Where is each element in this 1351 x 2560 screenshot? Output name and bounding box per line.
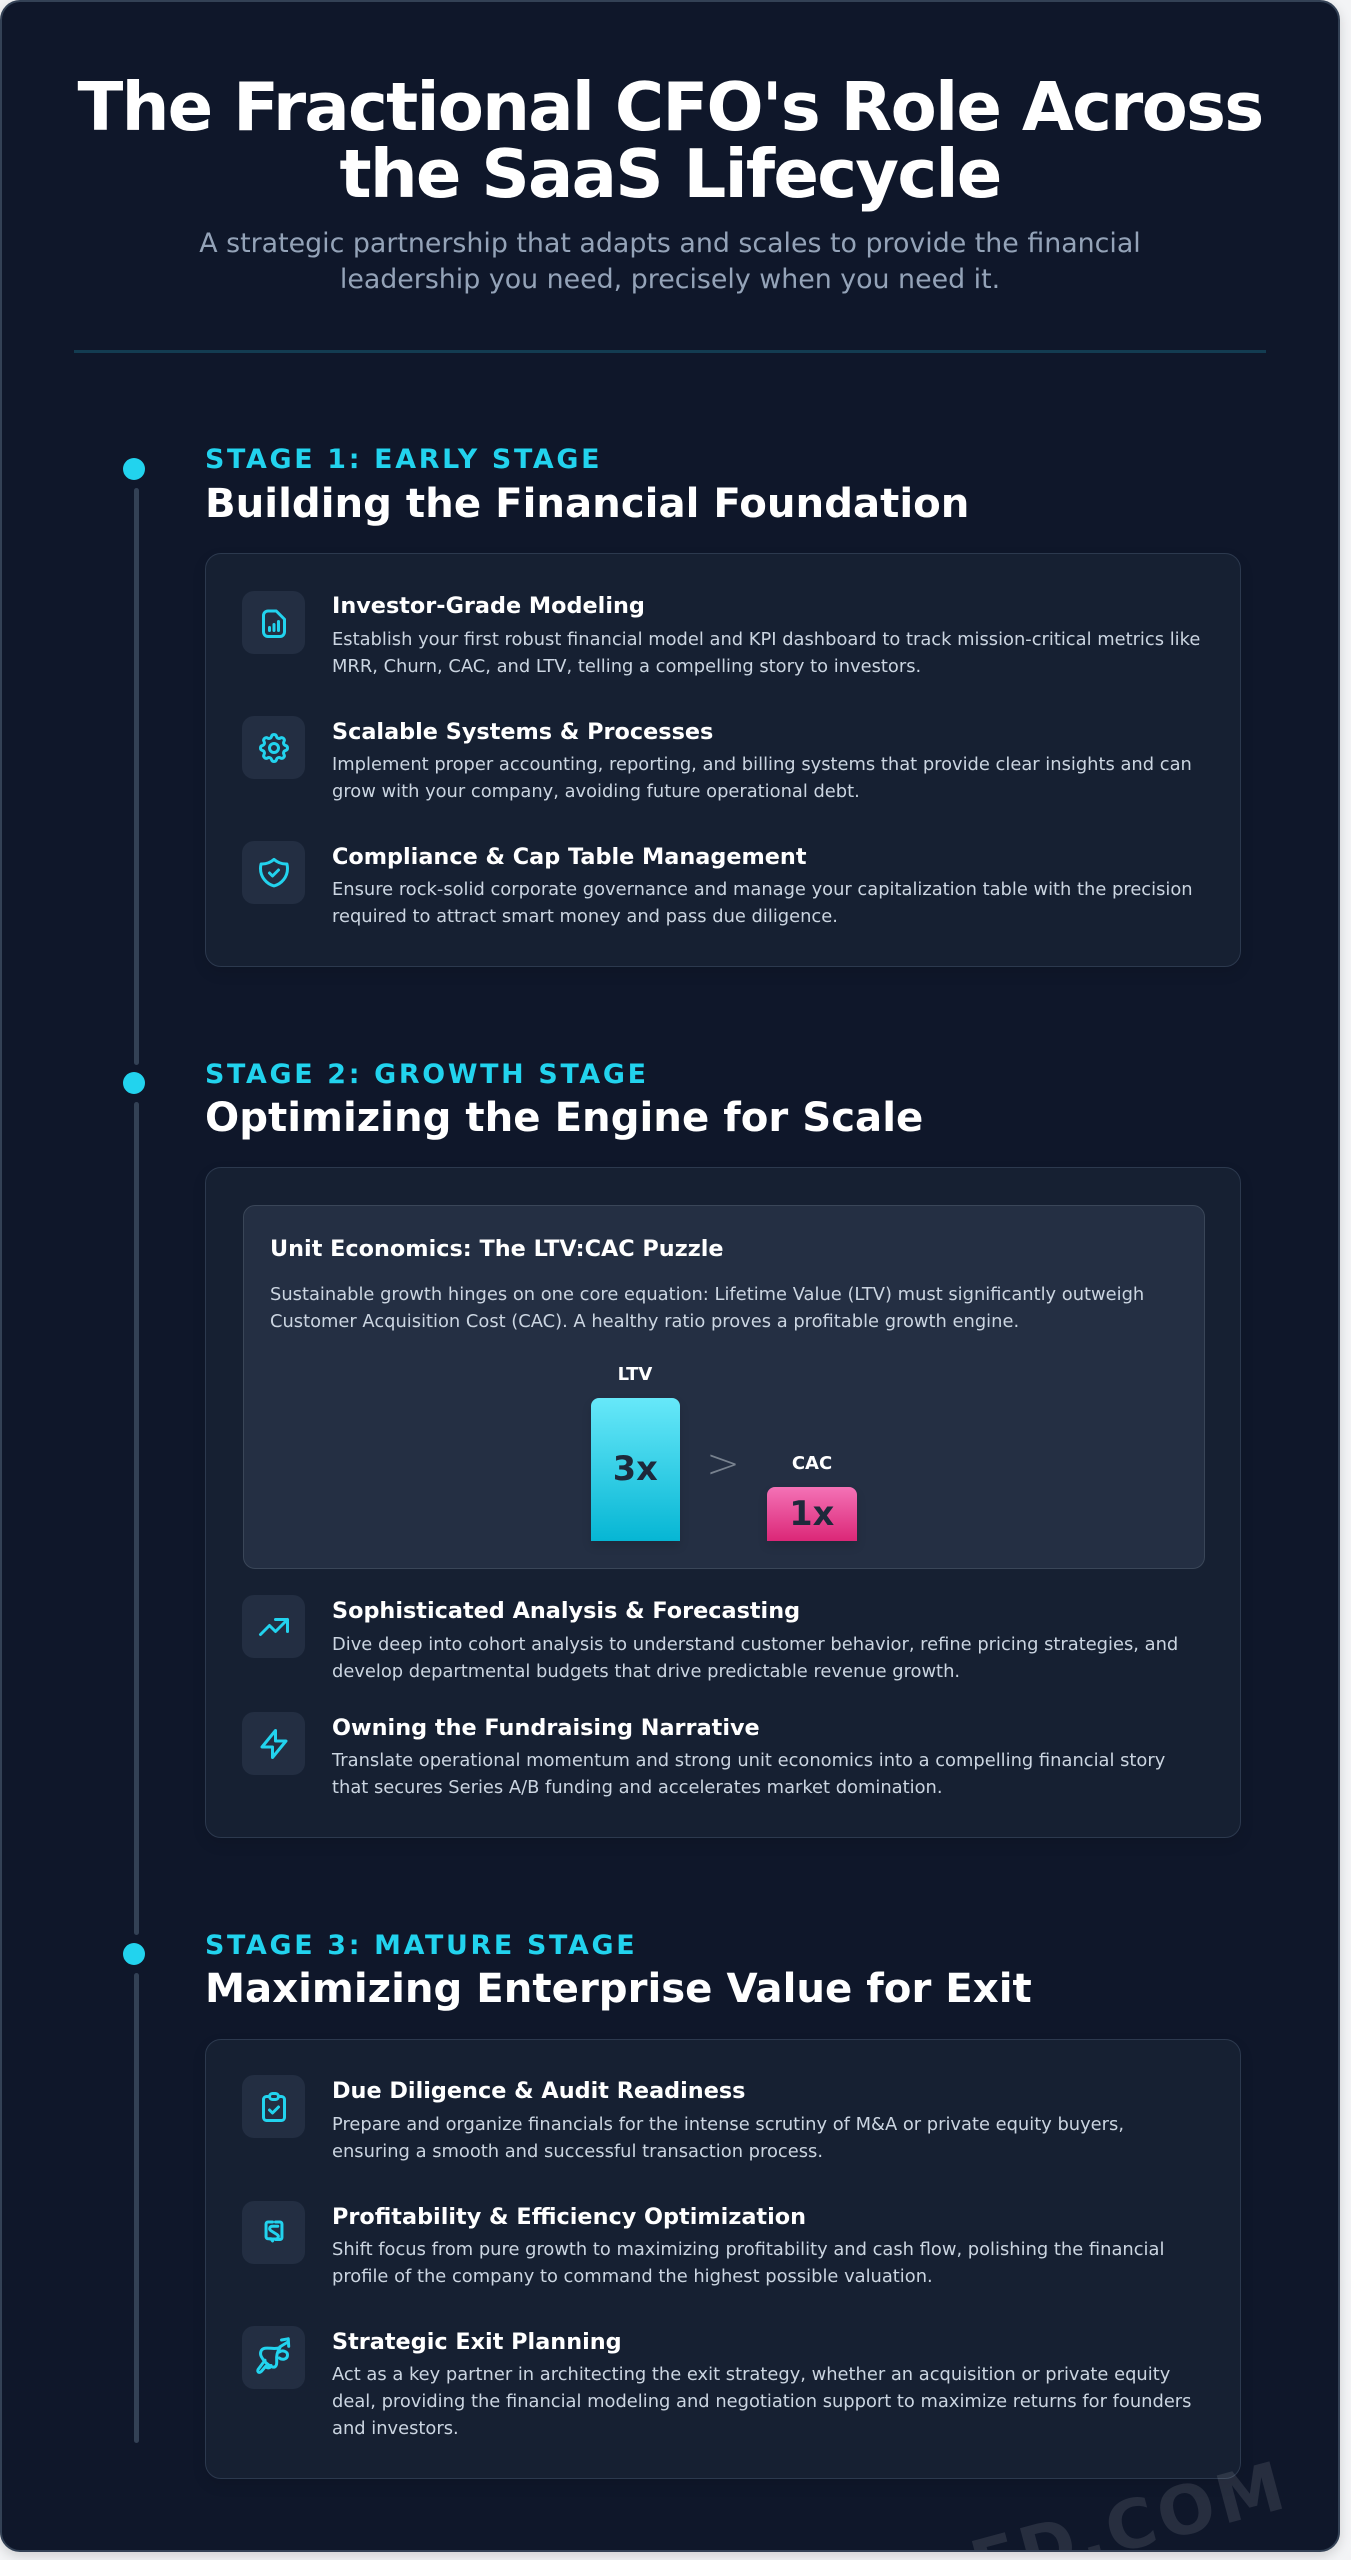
chart label: LTV: LTV [618,1364,652,1385]
item: exit planning title: Strategic Exit Planning [332,2329,622,2355]
item: investor-grade modeling title: Investor-Grade Modeling [332,593,645,619]
title: The Fractional CFO's Role Across [78,68,1262,146]
subtitle: leadership you need, precisely when you need it. [340,264,1000,295]
panel: unit economics [243,1205,1205,1569]
icon: lightning bolt [242,1712,305,1775]
stage 3 label: STAGE 3: MATURE STAGE [205,1930,637,1961]
icon: clipboard check [242,2075,305,2138]
icon: file chart [242,591,305,654]
item: profitability text: profile of the company to command the highest possible valuation. [332,2266,933,2287]
item: scalable systems title: Scalable Systems & Processes [332,719,713,745]
item: scalable systems text [332,754,1192,802]
unit economics text: Sustainable growth hinges on one core equation: Lifetime Value (LTV) must significantly outweigh [270,1284,1144,1305]
item: compliance text: Ensure rock-solid corporate governance and manage your capitalization table with the precision [332,879,1193,900]
item: exit planning text: and investors. [332,2418,459,2439]
item: compliance title: Compliance & Cap Table Management [332,844,807,870]
title [78,68,1262,213]
icon: dollar document [242,2201,305,2264]
timeline dot: stage 1 [123,458,145,480]
subtitle [199,228,1141,295]
bar: CAC 1x [767,1487,856,1541]
item: analysis title: Sophisticated Analysis & Forecasting [332,1598,800,1624]
icon: shield check [242,841,305,904]
item: fundraising text: Translate operational momentum and strong unit economics into a compelling financial story [332,1750,1165,1771]
item: due diligence title: Due Diligence & Audit Readiness [332,2078,745,2104]
timeline dot: stage 3 [123,1943,145,1965]
bar: LTV 3x: 3x [613,1449,658,1488]
bar: CAC 1x: 1x [789,1494,834,1533]
item: analysis text: develop departmental budgets that drive predictable revenue growth. [332,1661,960,1682]
icon: gear [242,716,305,779]
stage 1 label: STAGE 1: EARLY STAGE [205,444,602,475]
item: profitability title: Profitability & Efficiency Optimization [332,2204,806,2230]
item: compliance text: required to attract smart money and pass due diligence. [332,906,838,927]
timeline dot: stage 2 [123,1072,145,1094]
item: profitability text: Shift focus from pure growth to maximizing profitability and cash flow, polishing the financial [332,2239,1164,2260]
item: investor-grade modeling text [332,629,1200,677]
item: exit planning text: deal, providing the financial modeling and negotiation support to maximize returns for founders [332,2391,1191,2412]
item: fundraising text [332,1750,1165,1798]
item: investor-grade modeling text: MRR, Churn, CAC, and LTV, telling a compelling story to investors. [332,656,921,677]
item: compliance text [332,879,1193,927]
panel: stage 3 [205,2039,1241,2479]
icon: trending up [242,1595,305,1658]
item: scalable systems text: grow with your company, avoiding future operational debt. [332,781,860,802]
icon: rocket [242,2326,305,2389]
panel: stage 2 [205,1167,1241,1838]
timeline line: stage 3 [134,1973,139,2443]
comparison symbol: > [706,1440,740,1487]
item: fundraising text: that secures Series A/B funding and accelerates market domination. [332,1777,942,1798]
item: exit planning text: Act as a key partner in architecting the exit strategy, whether an acquisition or private equity [332,2364,1170,2385]
item: due diligence text [332,2114,1124,2162]
timeline line: stage 1 [134,488,139,1065]
item: analysis text: Dive deep into cohort analysis to understand customer behavior, refine pricing strategies, and [332,1634,1178,1655]
item: due diligence text: ensuring a smooth and successful transaction process. [332,2141,823,2162]
item: investor-grade modeling text: Establish your first robust financial model and KPI dashboard to track mission-critical metrics like [332,629,1200,650]
item: profitability text [332,2239,1164,2287]
item: fundraising title: Owning the Fundraising Narrative [332,1715,760,1741]
bar: LTV 3x [590,1398,680,1541]
stage 2 heading: Optimizing the Engine for Scale [205,1095,923,1141]
item: exit planning text [332,2364,1191,2439]
panel: stage 1 [205,553,1241,967]
unit economics text [270,1284,1144,1332]
title: the SaaS Lifecycle [339,135,1001,213]
item: scalable systems text: Implement proper accounting, reporting, and billing systems that provide clear insights and can [332,754,1192,775]
timeline line: stage 2 [134,1102,139,1935]
stage 1 heading: Building the Financial Foundation [205,481,969,527]
item: analysis text [332,1634,1178,1682]
stage 3 heading: Maximizing Enterprise Value for Exit [205,1966,1032,2012]
stage 2 label: STAGE 2: GROWTH STAGE [205,1059,649,1090]
unit economics text: Customer Acquisition Cost (CAC). A healthy ratio proves a profitable growth engine. [270,1311,1019,1332]
unit economics heading: Unit Economics: The LTV:CAC Puzzle [270,1236,724,1262]
subtitle: A strategic partnership that adapts and scales to provide the financial [199,228,1141,259]
item: due diligence text: Prepare and organize financials for the intense scrutiny of M&A or private equity buyers, [332,2114,1124,2135]
chart label: CAC: CAC [792,1453,832,1474]
